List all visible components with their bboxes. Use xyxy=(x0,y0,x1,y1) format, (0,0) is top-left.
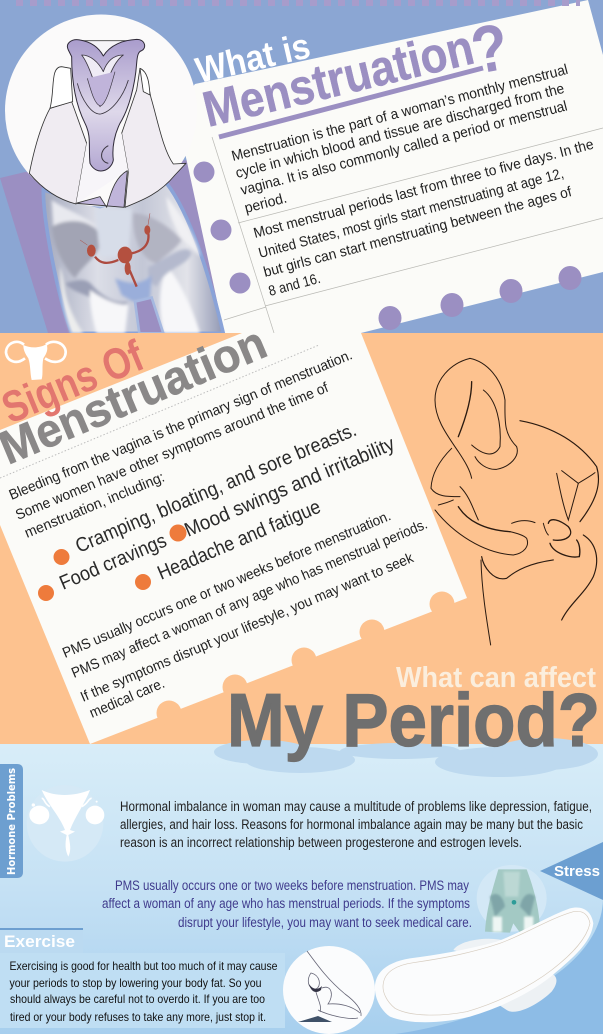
heading: Exercise: Exercise xyxy=(4,932,75,951)
symptom list xyxy=(38,419,398,601)
heading: What can affect My Period? xyxy=(227,662,600,762)
symptom list: Food cravings xyxy=(56,530,170,595)
heading: What is Menstruation? xyxy=(192,9,514,138)
illustration: sanitary pad xyxy=(375,907,593,1022)
text block: duration and age: 8 and 16. xyxy=(267,271,322,300)
text block: PMS: If the symptoms disrupt your lifestyle, you may want to seek xyxy=(78,550,417,706)
heading line: Menstruation: Menstruation xyxy=(197,19,479,138)
tab: Hormone Problems xyxy=(0,764,23,878)
text block: stress: affect a woman of any age who has menstrual periods. If the symptoms xyxy=(102,896,470,911)
symptom list: Headache and fatigue xyxy=(154,496,324,585)
text block: hormone problems xyxy=(120,799,592,850)
text block: PMS: medical care. xyxy=(87,676,167,722)
heading: Signs Of Menstruation xyxy=(0,315,274,474)
text block: signs intro: menstruation, including: xyxy=(22,470,167,542)
text block: stress: PMS usually occurs one or two weeks before menstruation. PMS may xyxy=(115,878,469,893)
panel: signs paper xyxy=(0,333,467,744)
heading line: Menstruation: Menstruation xyxy=(0,315,274,474)
illustration: circle with anatomy diagram xyxy=(5,14,197,207)
panel: exercise xyxy=(0,928,285,1028)
pad shadow xyxy=(395,900,603,1034)
text block: PMS: PMS usually occurs one or two weeks before menstruation. xyxy=(60,508,393,662)
heading underline xyxy=(219,68,483,137)
text block: exercise: should always be careful not to overdo it. If you are too xyxy=(10,992,265,1006)
symptom list: Mood swings and irritability xyxy=(181,433,398,542)
text block: exercise xyxy=(10,959,278,1024)
illustration: pelvis skeleton xyxy=(43,183,223,333)
icon: stress pelvis xyxy=(477,865,547,933)
illustration: yoga pose xyxy=(283,946,375,1034)
heading line: Signs Of: Signs Of xyxy=(0,331,151,433)
text block: hormone problems: reason is an incorrect relationship between progesterone and estrogen levels. xyxy=(120,835,522,850)
text block: signs intro: Bleeding from the vagina is the primary sign of menstruation. xyxy=(7,347,355,504)
icon: uterus xyxy=(6,342,66,380)
top dotted edge xyxy=(16,0,580,6)
text block: exercise: Exercising is good for health but too much of it may cause xyxy=(10,959,278,973)
section background: what is menstruation xyxy=(0,0,603,333)
text block: definition xyxy=(230,62,570,217)
text block: definition: cycle in which blood and tissue are discharged from the xyxy=(234,81,566,182)
symptom list: Cramping, bloating, and sore breasts. xyxy=(72,419,360,558)
tab: Stress: Stress xyxy=(554,863,600,880)
tab: Hormone Problems: Hormone Problems xyxy=(5,768,18,875)
panel: what is menstruation paper xyxy=(175,0,603,333)
text block: signs intro: Some women have other symptoms around the time of xyxy=(13,380,332,524)
heading line: What is: What is xyxy=(192,25,314,91)
section background: signs of menstruation xyxy=(0,333,603,744)
text block: stress: disrupt your lifestyle, you may want to seek medical care. xyxy=(178,915,472,930)
text block: PMS: PMS may affect a woman of any age who has menstrual periods. xyxy=(69,517,430,682)
decorative purple block xyxy=(0,160,224,333)
paper scallops xyxy=(156,592,454,726)
question mark: ? xyxy=(466,9,514,88)
section background: what can affect my period xyxy=(0,744,603,1034)
text block: duration and age: Most menstrual periods last from three to five days. In the xyxy=(252,137,595,242)
tab: Stress xyxy=(540,842,603,900)
icon: hormone uterus xyxy=(27,785,104,862)
text block: duration and age: United States, most girls start menstruating at age 12, xyxy=(257,166,566,262)
text block: duration and age: but girls can start menstruating between the ages of xyxy=(262,184,574,281)
text block: definition: Menstruation is the part of a woman’s monthly menstrual xyxy=(230,62,570,165)
text block: stress xyxy=(102,878,472,930)
illustration: woman holding abdomen xyxy=(431,358,598,645)
text block: exercise: your periods to stop by lowering your body fat. So you xyxy=(10,976,262,990)
text block: exercise: tired or your body refuses to take any more, just stop it. xyxy=(10,1010,266,1024)
bullets xyxy=(38,524,186,601)
text block: definition: period. xyxy=(243,191,289,217)
text block: duration and age xyxy=(252,137,595,300)
text block: definition: vagina. It is also commonly called a period or menstrual xyxy=(239,98,569,199)
uterus xyxy=(80,213,150,287)
purple gap between legs xyxy=(135,298,163,333)
clouds behind heading xyxy=(214,738,598,777)
binder holes xyxy=(194,162,582,330)
